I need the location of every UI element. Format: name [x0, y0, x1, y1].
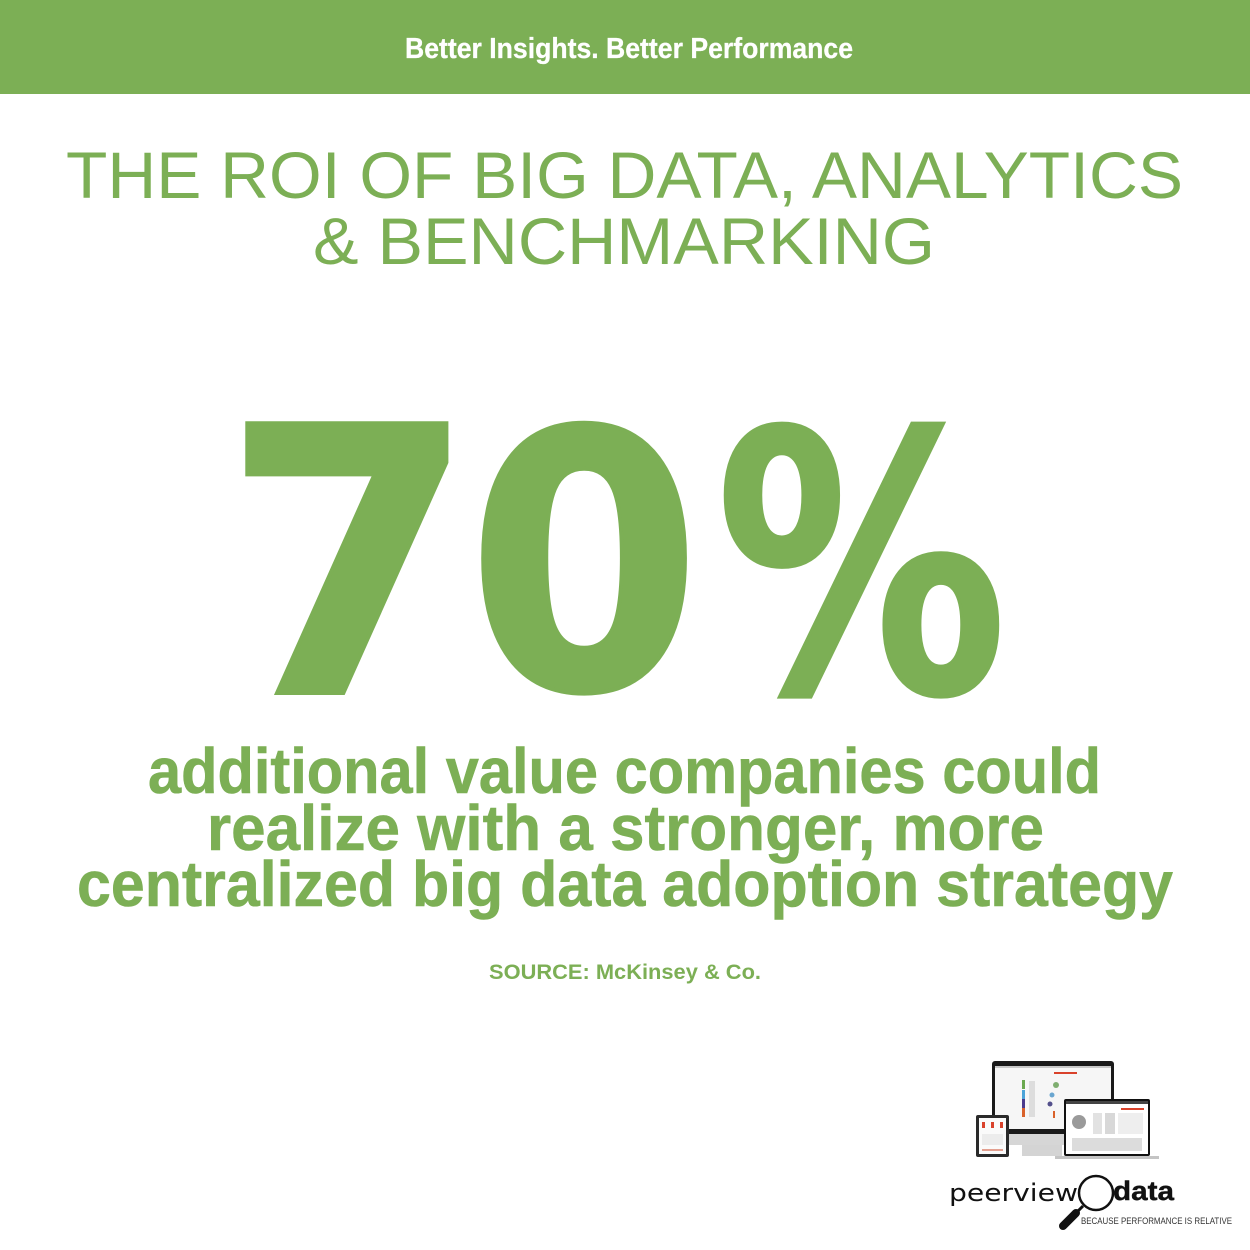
- icon: tablet: [976, 1115, 1009, 1157]
- big statistic: 70%: 0: [467, 357, 701, 773]
- icon: magnifying glass: [1063, 1176, 1113, 1226]
- big statistic: 70%: [223, 351, 1007, 781]
- title: & BENCHMARKING: [313, 204, 935, 278]
- logo: peerview data wordmark: [949, 1176, 1232, 1227]
- title: [66, 138, 1183, 278]
- icon: desktop monitor: [992, 1061, 1114, 1156]
- description text: [77, 735, 1173, 920]
- logo: peerview data wordmark: data: [1113, 1176, 1175, 1206]
- big statistic: 70%: %: [716, 358, 1007, 777]
- logo: device mockups: [976, 1061, 1159, 1159]
- big statistic: 70%: 7: [223, 351, 475, 781]
- title: THE ROI OF BIG DATA, ANALYTICS: [66, 138, 1183, 212]
- logo: peerview data wordmark: peerview: [949, 1179, 1078, 1207]
- header banner: [0, 0, 1250, 94]
- source note: SOURCE: McKinsey & Co.: [489, 961, 761, 984]
- description text: additional value companies could: [148, 735, 1101, 807]
- header banner: Better Insights. Better Performance: [405, 33, 853, 65]
- description text: centralized big data adoption strategy: [77, 848, 1173, 920]
- icon: laptop: [1055, 1099, 1159, 1159]
- description text: realize with a stronger, more: [207, 792, 1044, 864]
